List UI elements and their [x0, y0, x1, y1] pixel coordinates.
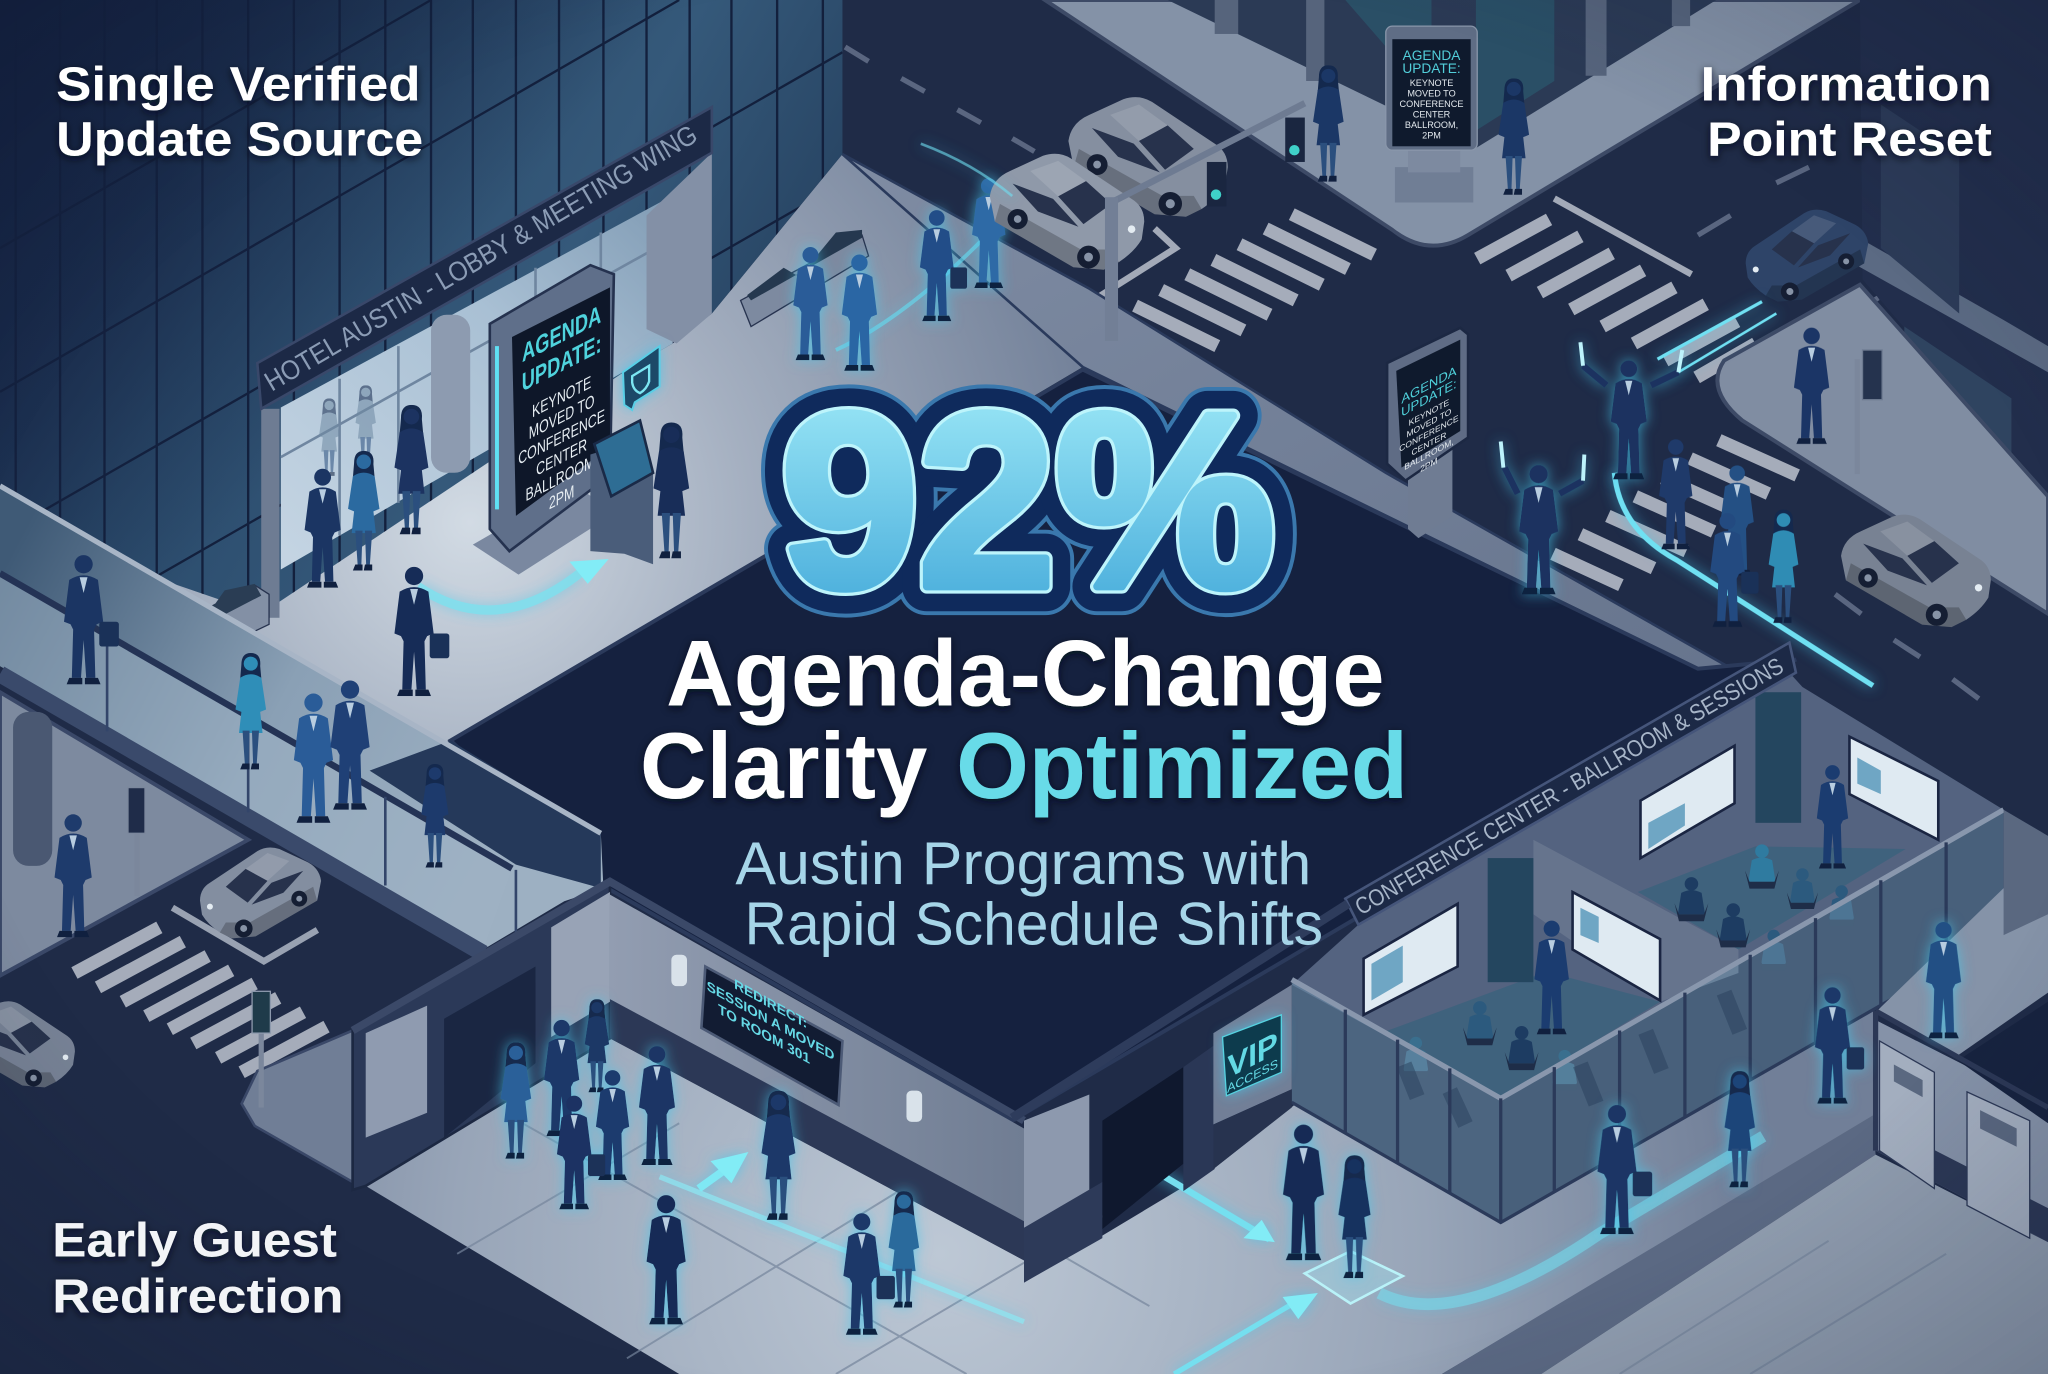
arrow: lobby path to kiosk [418, 559, 609, 610]
walking path glow [836, 216, 1006, 350]
digital totem: agenda update: KEYNOTE [532, 373, 591, 422]
glass partition walls [1292, 810, 2004, 1222]
seated audience [1400, 844, 1857, 1091]
presenters [1534, 765, 1848, 1034]
digital totem: agenda update: CONFERENCE [518, 406, 605, 469]
crosswalk: north-east [1477, 219, 1755, 377]
subheading: austin programs: Rapid Schedule Shifts [744, 890, 1323, 957]
digital sign: corridor redirect: SESSION A MOVED [707, 979, 835, 1065]
people: traffic marshals and pedestrians [1501, 328, 1829, 627]
heading: clarity optimized: Clarity [640, 713, 927, 818]
digital totem: agenda update: 2PM [549, 482, 574, 514]
digital totem: agenda update: BALLROOM, [525, 450, 598, 506]
hero stat: 92%: 92% [781, 361, 1275, 639]
floor marker platform [1305, 1251, 1403, 1303]
heading: clarity optimized [640, 713, 1408, 818]
crosswalk: south-west [74, 927, 327, 1072]
digital sign: roadside: KEYNOTE [1409, 397, 1449, 428]
road dashes and stop lines [172, 47, 1979, 961]
digital sign: top corner: CONFERENCE [1400, 99, 1463, 109]
digital sign: corridor redirect: TO ROOM 301 [718, 1002, 810, 1068]
crosswalk: north-west [1135, 214, 1374, 346]
digital sign: top corner: CENTER [1413, 110, 1451, 120]
right service wing with doors [1876, 810, 2048, 1242]
digital sign: top corner: KEYNOTE [1410, 78, 1453, 88]
VIP access sign: ACCESS [1227, 1056, 1278, 1096]
arrows: corridor guidance [660, 1136, 1763, 1374]
icon: verified shield bubble [623, 346, 660, 410]
digital sign: top corner [1386, 26, 1477, 202]
check-in kiosk [590, 421, 653, 564]
digital sign: top corner: MOVED TO [1407, 89, 1456, 99]
traffic signal mast [1105, 103, 1305, 341]
top building [1168, 0, 1716, 149]
hotel glass facade [0, 0, 842, 666]
people: on the skybridge [64, 555, 449, 868]
crosswalk: south-east [1553, 440, 1797, 585]
digital totem: agenda update: CENTER [536, 436, 587, 480]
digital totem: agenda update: UPDATE: [522, 328, 602, 397]
banner: hotel lobby sign: HOTEL AUSTIN - LOBBY & MEETING WING [259, 118, 702, 397]
label: single verified update source: Update Source [56, 112, 423, 166]
label: single verified update source: Single Verified [56, 58, 421, 112]
digital sign: roadside: CENTER [1411, 430, 1447, 458]
lobby entrance glass [261, 153, 712, 618]
subheading: austin programs [735, 830, 1323, 957]
people: walkers near hotel entrance [793, 178, 1005, 371]
people: corridor group [501, 999, 919, 1335]
cars [0, 97, 1991, 1087]
digital sign: roadside [1387, 328, 1468, 538]
digital sign: top corner: UPDATE: [1402, 61, 1461, 76]
central dark panel [451, 370, 1796, 1121]
sidewalk under skybridge [0, 692, 248, 976]
digital sign: roadside: 2PM [1420, 455, 1438, 474]
digital totem: agenda update: AGENDA [522, 299, 601, 368]
banner: conference center sign: CONFERENCE CENTER - BALLROOM & SESSIONS [1350, 652, 1788, 920]
entrance wall with VIP sign [1012, 904, 1348, 1283]
hero stat: 92%: 92% [781, 361, 1275, 639]
label: single verified update source [56, 58, 423, 166]
label: early guest redirection [52, 1213, 344, 1324]
digital sign: corridor redirect [701, 962, 842, 1105]
digital sign: roadside: UPDATE: [1401, 375, 1457, 420]
heading: agenda-change: Agenda-Change [666, 620, 1384, 725]
panel: glass skybridge [0, 486, 603, 953]
hero stat: 92%: 92% [781, 361, 1275, 639]
right sidewalk [1717, 285, 2048, 614]
sidewalk strip along main road [842, 154, 1750, 679]
label: early guest redirection: Redirection [52, 1270, 344, 1324]
digital sign: roadside: CONFERENCE [1399, 413, 1459, 454]
digital totem: agenda update [473, 265, 616, 575]
right traffic signal [1855, 350, 1882, 474]
VIP access sign: VIP [1227, 1026, 1278, 1086]
planter beside skybridge [172, 584, 269, 660]
people: sign staff at top corner [1313, 65, 1529, 195]
VIP access sign [1223, 1015, 1281, 1096]
digital sign: top corner: BALLROOM, [1405, 120, 1458, 130]
glow trails: traffic flow [921, 144, 1873, 686]
right building [1849, 0, 2048, 549]
corner sidewalk with crossing sign [242, 991, 353, 1182]
planter near hotel entrance [741, 230, 869, 327]
people: conference walkway [1283, 922, 1961, 1278]
label: early guest redirection: Early Guest [52, 1213, 337, 1267]
digital totem: agenda update: MOVED TO [529, 392, 594, 444]
central plaza and lobby floor [170, 154, 1083, 784]
digital sign: top corner: AGENDA [1403, 48, 1461, 63]
digital sign: corridor redirect: REDIRECT: [734, 977, 807, 1032]
label: information point reset: Point Reset [1707, 112, 1992, 166]
digital sign: top corner: 2PM [1422, 130, 1441, 140]
digital sign: roadside: BALLROOM, [1404, 437, 1454, 472]
heading: clarity optimized: Optimized [956, 713, 1408, 818]
label: information point reset [1701, 58, 1992, 166]
top corner sidewalk [1045, 0, 1860, 246]
panel: south corridor building [353, 882, 2048, 1374]
people: lobby [305, 385, 689, 696]
subheading: austin programs: Austin Programs with [735, 830, 1311, 897]
projection screens [1364, 737, 1938, 1015]
hero stat: 92%: 92% [781, 361, 1275, 639]
digital sign: roadside: MOVED TO [1406, 406, 1451, 440]
panel: conference center rooms [1292, 673, 2004, 1222]
digital sign: roadside: AGENDA [1401, 362, 1457, 407]
label: information point reset: Information [1701, 58, 1992, 112]
